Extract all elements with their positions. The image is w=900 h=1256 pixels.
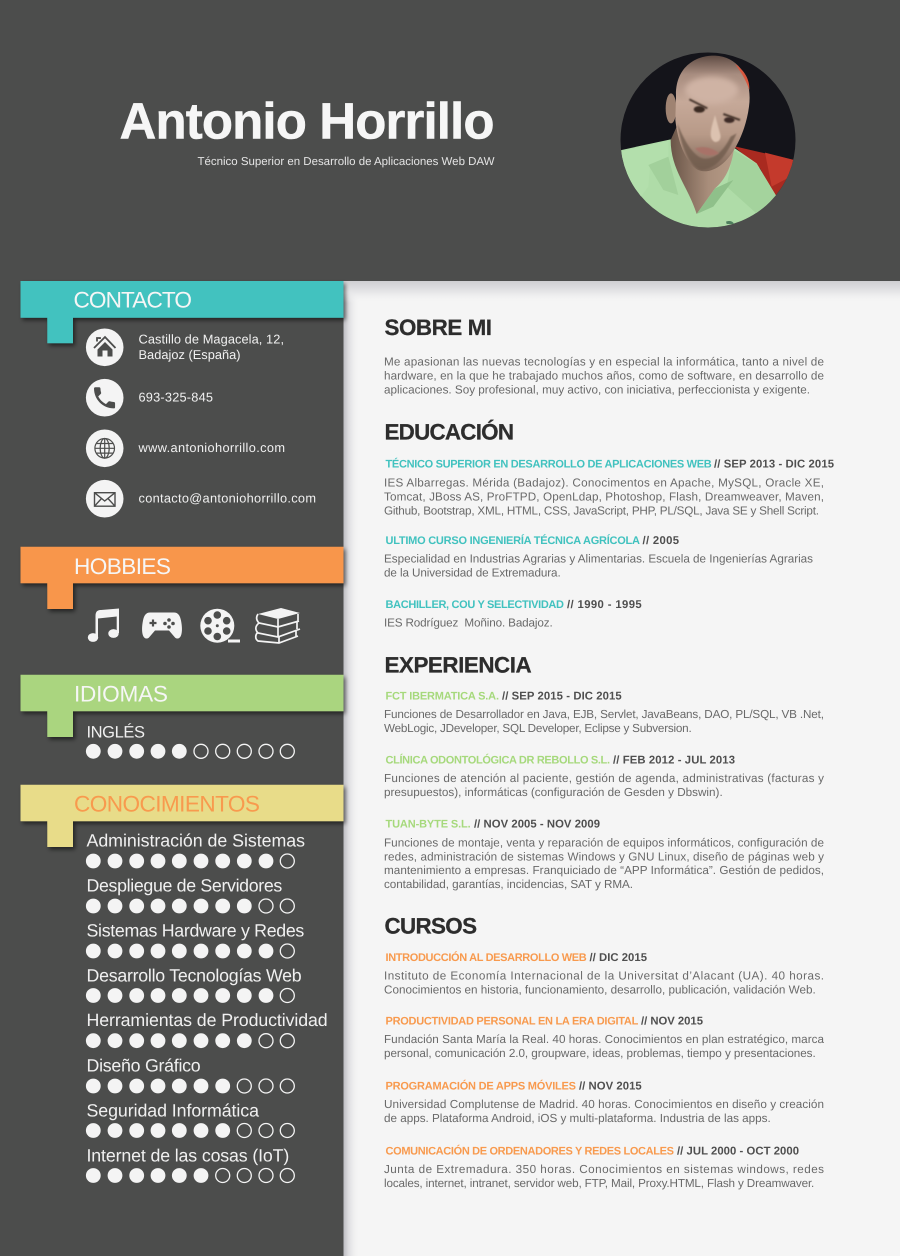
entry: fct ibermatica: // SEP 2015 - DIC 2015	[502, 690, 622, 702]
entry: bachiller	[384, 599, 642, 630]
skill: desarrollo tecnologias web: Desarrollo Tecnologías Web	[86, 966, 302, 986]
banner: hobbies	[20, 547, 344, 609]
heading: sobre mi: SOBRE MI	[384, 315, 492, 340]
entry: productividad personal: Fundación Santa María la Real. 40 horas. Conocimientos en plan estratégico, marca	[384, 1033, 824, 1046]
entry: ingenieria tecnica agricola: de la Universidad de Extremadura.	[384, 566, 561, 579]
skill: sistemas hardware y redes	[86, 921, 304, 958]
section: cursos	[384, 914, 824, 1190]
skill: diseno grafico: Diseño Gráfico	[86, 1056, 201, 1076]
photo	[618, 52, 797, 240]
contact: phone	[86, 379, 213, 417]
entry: bachiller: IES Rodríguez Moñino. Badajoz.	[384, 616, 553, 630]
contact: phone: 693-325-845	[138, 390, 213, 405]
entry: introduccion al desarrollo web: Instituto de Economía Internacional de la Universitat d’Alacant (UA). 40 horas.	[384, 970, 824, 983]
sofa	[735, 146, 793, 196]
icon: music	[88, 608, 119, 642]
entry: programacion de apps moviles: PROGRAMACIÓN DE APPS MÓVILES	[386, 1079, 576, 1092]
banner: contacto	[20, 281, 344, 343]
entry: fct ibermatica	[384, 690, 824, 735]
skill: herramientas de productividad	[86, 1010, 328, 1048]
text block: sobre mi: hardware, en la que he trabajado muchos años, como de software, en desarrollo de	[384, 369, 824, 382]
rating: ingles	[86, 744, 294, 759]
entry: comunicacion de ordenadores	[384, 1144, 824, 1190]
entry: introduccion al desarrollo web	[384, 951, 824, 997]
entry: programacion de apps moviles: de apps. Plataforma Android, iOS y multi-plataforma. Industria de las apps.	[384, 1112, 771, 1125]
skill: seguridad informatica	[86, 1101, 294, 1138]
entry: programacion de apps moviles: Universidad Complutense de Madrid. 40 horas. Conocimientos en diseño y creación	[384, 1098, 824, 1111]
contact: website: www.antoniohorrillo.com	[138, 440, 285, 455]
skill: herramientas de productividad: Herramientas de Productividad	[86, 1010, 328, 1030]
banner: conocimientos	[20, 785, 344, 847]
section: educacion	[384, 419, 834, 630]
title: Antonio Horrillo	[120, 92, 494, 149]
entry: bachiller: BACHILLER, COU Y SELECTIVIDAD	[386, 599, 564, 611]
entry: programacion de apps moviles	[384, 1079, 824, 1125]
entry: tecnico superior	[384, 458, 834, 517]
ear	[666, 93, 676, 123]
skill: despliegue de servidores	[86, 876, 294, 913]
banner: contacto: CONTACTO	[74, 288, 192, 313]
panel: idiomas	[20, 675, 344, 759]
entry: introduccion al desarrollo web: Conocimientos en historia, funcionamiento, desarrollo, publicación, validación Web.	[384, 984, 816, 997]
entry: ingenieria tecnica agricola: ULTIMO CURSO INGENIERÍA TÉCNICA AGRÍCOLA	[386, 534, 640, 547]
entry: tecnico superior: // SEP 2013 - DIC 2015	[714, 459, 834, 471]
panel: contacto	[20, 281, 344, 518]
entry: productividad personal: // NOV 2015	[641, 1015, 703, 1027]
contact: website	[86, 430, 285, 467]
text block: sobre mi: Me apasionan las nuevas tecnologías y en especial la informática, tanto a nivel de	[384, 355, 824, 368]
icon: books	[256, 608, 300, 643]
skill: despliegue de servidores: Despliegue de Servidores	[86, 876, 282, 896]
entry: ingenieria tecnica agricola	[384, 534, 813, 579]
entry: fct ibermatica: Funciones de Desarrollador en Java, EJB, Servlet, JavaBeans, DAO, PL/SQL, VB .Net,	[384, 708, 824, 721]
entry: ingenieria tecnica agricola: // 2005	[642, 535, 679, 547]
entry: tuan-byte: TUAN-BYTE S.L.	[386, 819, 471, 831]
panel: main content background	[344, 281, 900, 1256]
entry: tuan-byte: contabilidad, garantías, incidencias, SAT y RMA.	[384, 878, 633, 891]
icon: film reel	[200, 609, 240, 643]
header	[120, 52, 797, 240]
contact: email: contacto@antoniohorrillo.com	[138, 491, 316, 506]
section: experiencia	[384, 652, 824, 891]
contact: email	[86, 480, 316, 518]
neck	[671, 127, 734, 214]
entry: clinica odontologica: // FEB 2012 - JUL 2013	[613, 754, 735, 766]
entry: ingenieria tecnica agricola: Especialidad en Industrias Agrarias y Alimentarias. Escuela de Ingenierías Agrarias	[384, 553, 813, 566]
skill: desarrollo tecnologias web	[86, 966, 302, 1003]
skill: internet de las cosas: Internet de las cosas (IoT)	[86, 1146, 289, 1166]
entry: clinica odontologica: Funciones de atención al paciente, gestión de agenda, administrativas (facturas y	[384, 772, 824, 785]
contact: address: Castillo de Magacela, 12,	[138, 331, 284, 346]
entry: tuan-byte	[384, 819, 824, 891]
text block: sobre mi	[384, 355, 824, 396]
banner: idiomas: IDIOMAS	[74, 682, 168, 707]
text block: sobre mi: aplicaciones. Soy profesional, muy activo, con iniciativa, perfeccionista y exigente.	[384, 383, 810, 396]
entry: tuan-byte: redes, administración de sistemas Windows y GNU Linux, diseño de páginas web y	[384, 850, 824, 863]
entry: productividad personal: personal, comunicación 2.0, groupware, ideas, problemas, tiempo y presentaciones.	[384, 1047, 816, 1060]
entry: tecnico superior: TÉCNICO SUPERIOR EN DESARROLLO DE APLICACIONES WEB	[386, 458, 712, 471]
entry: tecnico superior: Tomcat, JBoss AS, ProFTPD, OpenLdap, Photoshop, Flash, Dreamweaver, Maven,	[384, 490, 824, 503]
entry: fct ibermatica: WebLogic, JDeveloper, SQL Developer, Eclipse y Subversion.	[384, 722, 692, 735]
skill: sistemas hardware y redes: Sistemas Hardware y Redes	[86, 921, 304, 941]
subtitle: Técnico Superior en Desarrollo de Aplicaciones Web DAW	[198, 156, 495, 168]
entry: tecnico superior: Github, Bootstrap, XML, HTML, CSS, JavaScript, PHP, PL/SQL, Java SE y Shell Script.	[384, 504, 819, 517]
heading: experiencia: EXPERIENCIA	[384, 652, 532, 677]
entry: clinica odontologica: CLÍNICA ODONTOLÓGICA DR REBOLLO S.L.	[386, 753, 610, 766]
skill: internet de las cosas	[86, 1146, 294, 1183]
language label: ingles: INGLÉS	[86, 722, 145, 741]
entry: productividad personal	[384, 1015, 824, 1060]
shirt	[621, 139, 776, 228]
section: sobre mi	[384, 315, 824, 396]
entry: productividad personal: PRODUCTIVIDAD PERSONAL EN LA ERA DIGITAL	[386, 1015, 639, 1027]
entry: clinica odontologica: presupuestos), informáticas (configuración de Gesden y Dbswin).	[384, 786, 723, 799]
banner: idiomas	[20, 675, 344, 737]
entry: bachiller: // 1990 - 1995	[567, 599, 642, 611]
heading: cursos: CURSOS	[384, 914, 477, 939]
skill: seguridad informatica: Seguridad Informática	[86, 1101, 259, 1121]
entry: tuan-byte: // NOV 2005 - NOV 2009	[474, 819, 600, 831]
entry: comunicacion de ordenadores: Junta de Extremadura. 350 horas. Conocimientos en sistemas windows, redes	[384, 1163, 824, 1176]
entry: programacion de apps moviles: // NOV 2015	[579, 1080, 642, 1092]
icon: game controller	[142, 612, 182, 639]
entry: comunicacion de ordenadores: COMUNICACIÓN DE ORDENADORES Y REDES LOCALES	[386, 1144, 674, 1157]
entry: comunicacion de ordenadores: locales, internet, intranet, servidor web, FTP, Mail, Proxy.HTML, Flash y Dreamwaver.	[384, 1177, 814, 1190]
entry: fct ibermatica: FCT IBERMATICA S.A.	[386, 690, 499, 702]
panel: hobbies	[20, 547, 344, 643]
contact: address	[86, 328, 284, 366]
contact: address: Badajoz (España)	[138, 347, 240, 362]
entry: tecnico superior: IES Albarregas. Mérida (Badajoz). Conocimentos en Apache, MySQL, Oracle XE,	[384, 476, 824, 489]
banner: conocimientos: CONOCIMIENTOS	[74, 792, 260, 817]
skill: diseno grafico	[86, 1056, 294, 1093]
skill: administracion de sistemas	[86, 831, 305, 868]
head	[675, 56, 750, 171]
entry: comunicacion de ordenadores: // JUL 2000 - OCT 2000	[677, 1145, 799, 1157]
banner: hobbies: HOBBIES	[74, 554, 171, 579]
entry: introduccion al desarrollo web: // DIC 2015	[590, 952, 647, 964]
panel: conocimientos	[20, 785, 344, 1183]
entry: tuan-byte: Funciones de montaje, venta y reparación de equipos informáticos, configuración de	[384, 836, 824, 850]
entry: introduccion al desarrollo web: INTRODUCCIÓN AL DESARROLLO WEB	[386, 951, 587, 964]
heading: educacion: EDUCACIÓN	[384, 419, 514, 444]
skill: administracion de sistemas: Administración de Sistemas	[86, 831, 305, 851]
entry: clinica odontologica	[384, 753, 824, 799]
entry: tuan-byte: mantenimiento a empresas. Franquiciado de “APP Informática”. Gestión de pedidos,	[384, 864, 824, 877]
